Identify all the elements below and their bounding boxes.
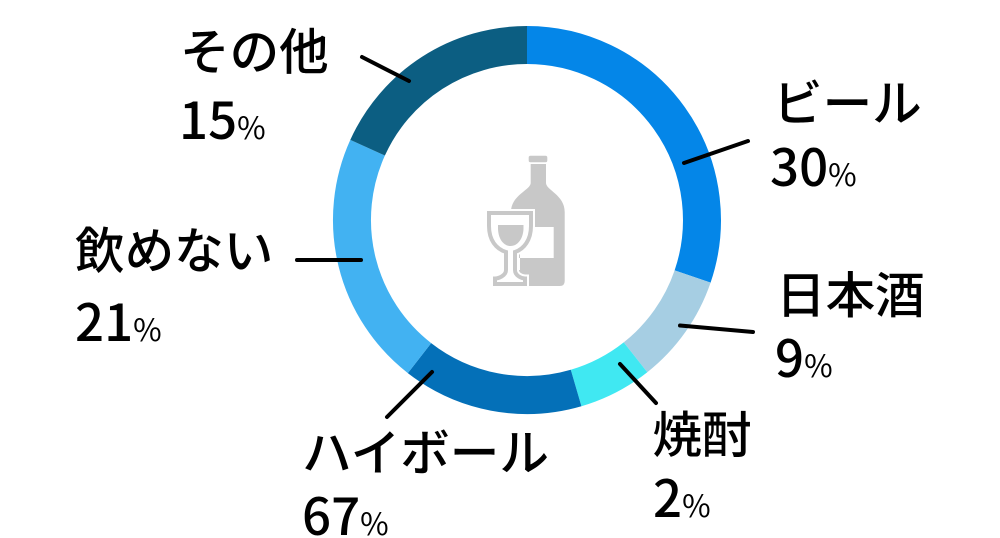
label: ビール: ビール	[773, 64, 922, 136]
label: 焼酎: 焼酎	[652, 396, 752, 468]
label: ハイボール	[302, 414, 549, 538]
label: ビール	[770, 64, 922, 201]
label: その他: その他	[180, 12, 329, 84]
label: 飲めない	[75, 212, 273, 356]
label: 飲めない: 21%	[75, 282, 162, 356]
wine glass	[489, 213, 531, 284]
label: 日本酒	[775, 256, 925, 392]
label: 焼酎: 2%	[653, 458, 711, 532]
segment: その他 15%	[368, 45, 527, 148]
label: その他	[179, 12, 329, 154]
segment: ハイボール 67%	[420, 358, 576, 395]
segment: 日本酒 9%	[636, 276, 693, 357]
label: ハイボール: ハイボール	[302, 414, 549, 486]
label: 日本酒: 9%	[775, 318, 833, 392]
label: 日本酒: 日本酒	[776, 256, 925, 328]
bottle	[510, 156, 565, 286]
leader lines	[297, 57, 753, 417]
label: その他: 15%	[179, 80, 266, 154]
label: ビール: 30%	[770, 127, 857, 201]
segment: 焼酎 2%	[576, 357, 636, 388]
donut chart	[352, 45, 702, 395]
icon: bottle and wine glass	[489, 156, 565, 286]
segment: ビール 30%	[527, 45, 702, 276]
label: 焼酎	[652, 396, 752, 532]
wine	[498, 225, 524, 246]
segment: 飲めない 21%	[352, 148, 420, 358]
label: 飲めない: 飲めない	[75, 212, 273, 284]
